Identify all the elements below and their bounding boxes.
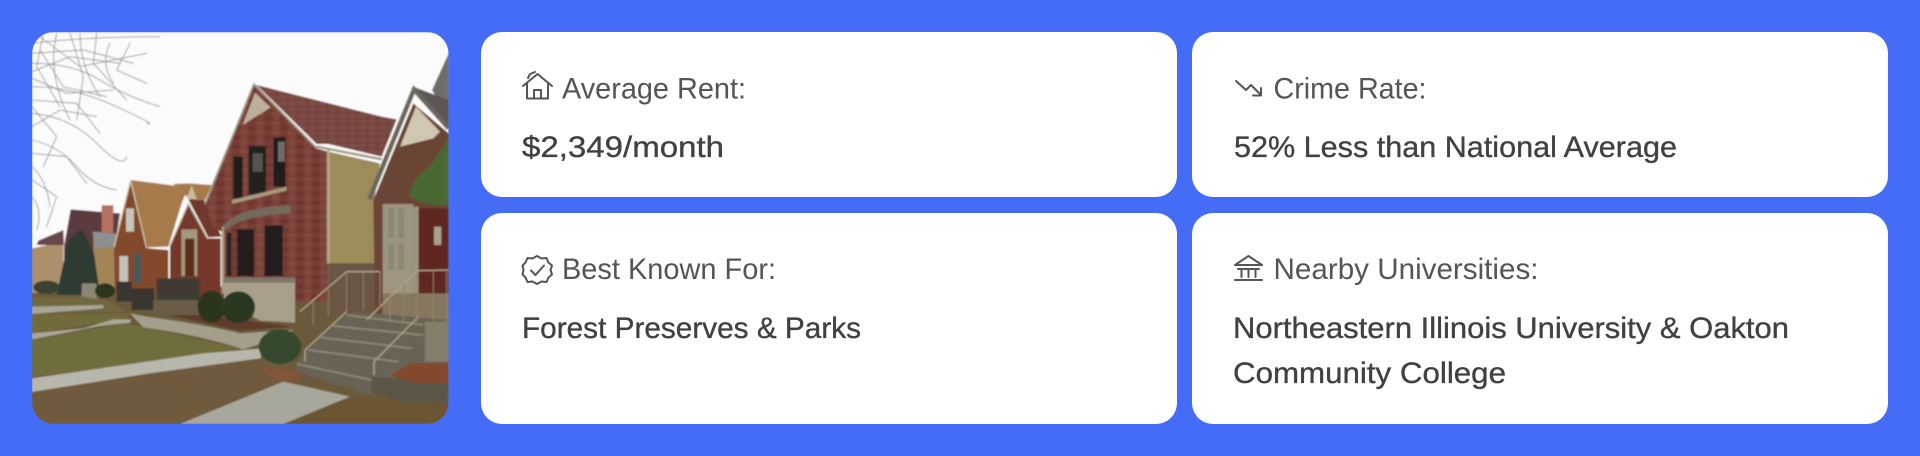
main brick house	[205, 84, 397, 323]
label: crime rate: Crime Rate:	[1274, 73, 1426, 106]
card: crime rate	[1192, 32, 1888, 197]
icon: trending down	[1236, 81, 1261, 96]
icon: verified badge	[522, 256, 552, 284]
far houses	[32, 205, 120, 300]
label: average rent: Average Rent:	[562, 73, 746, 106]
bare tree branches	[32, 33, 160, 230]
tan-roof house	[114, 180, 212, 295]
card: best known for	[481, 213, 1177, 424]
lawns and walks	[32, 281, 449, 424]
label: best known for: Best Known For:	[562, 253, 776, 286]
value: best known for: Forest Preserves & Parks	[522, 312, 861, 345]
icon: house	[523, 72, 552, 98]
steps and railings	[297, 270, 449, 403]
value: rent: $2,349/month	[522, 131, 724, 164]
ground base	[32, 287, 449, 424]
card: average rent	[481, 32, 1177, 197]
small gable	[117, 199, 222, 310]
photo: suburban brick houses	[32, 32, 449, 424]
value: nearby universities: Northeastern Illinois University & Oakton	[1233, 312, 1789, 345]
card: nearby universities	[1192, 213, 1888, 424]
label: nearby universities: Nearby Universities:	[1274, 253, 1538, 286]
icon: university building	[1235, 256, 1262, 280]
value: nearby universities: Community College	[1233, 357, 1506, 390]
value: crime rate: 52% Less than National Average	[1234, 131, 1677, 164]
right house	[369, 53, 449, 320]
value: nearby universities	[1233, 312, 1789, 390]
